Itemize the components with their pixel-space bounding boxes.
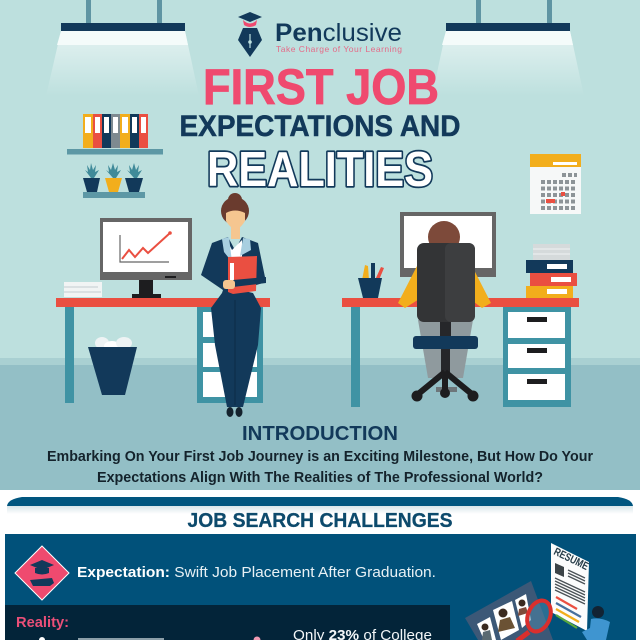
section top band xyxy=(7,497,633,506)
right desk xyxy=(342,298,579,407)
icon: magnifying glass xyxy=(517,597,555,640)
icon: laptop with candidate photos xyxy=(465,581,553,640)
left desk xyxy=(56,298,270,403)
introduction body: Expectations Align With The Realities of The Professional World? xyxy=(97,470,543,486)
icon: resume sheet: RESUME xyxy=(552,546,590,573)
wall calendar xyxy=(530,154,581,214)
logo tagline: Take Charge of Your Learning xyxy=(276,44,402,54)
right monitor xyxy=(400,212,496,277)
introduction section xyxy=(47,423,593,486)
resume illustration xyxy=(465,543,610,640)
blue panel: job search challenges xyxy=(5,534,636,640)
introduction heading: INTRODUCTION xyxy=(242,423,398,445)
icon: person in blue holding resume xyxy=(582,606,610,640)
band fade xyxy=(7,506,633,514)
background wall xyxy=(0,0,640,366)
pen cup xyxy=(358,263,384,298)
icon: binders on shelf xyxy=(67,114,163,154)
expectation text: Expectation: Swift Job Placement After Graduation. xyxy=(77,564,436,581)
woman with folder xyxy=(201,193,266,417)
left monitor with rising chart xyxy=(100,218,192,298)
white section background xyxy=(0,490,640,640)
reality heading: Reality: xyxy=(16,614,69,631)
stacked folders and papers xyxy=(526,244,577,298)
logo xyxy=(238,12,402,57)
floor xyxy=(0,358,640,490)
icon: potted plants on shelf xyxy=(83,163,145,198)
ceiling lamp left xyxy=(46,0,199,96)
title: first job: FIRST JOB xyxy=(203,59,439,115)
waste basket xyxy=(88,337,137,395)
icon: pen nib with graduation cap xyxy=(238,12,262,57)
reality box xyxy=(5,605,450,640)
statistic: left, cut off xyxy=(39,637,164,640)
stack of papers xyxy=(64,282,102,297)
title: realities: REALITIES xyxy=(207,143,433,197)
icon: resume sheet xyxy=(551,543,590,631)
icon: diamond with graduation cap xyxy=(15,546,69,600)
person seated in chair from behind xyxy=(398,221,491,402)
logo wordmark: Penclusive xyxy=(275,19,402,47)
job search heading: JOB SEARCH CHALLENGES xyxy=(188,510,452,532)
introduction body xyxy=(47,449,593,486)
ceiling lamp right xyxy=(432,0,584,96)
statistic: right marker xyxy=(254,636,260,640)
introduction body: Embarking On Your First Job Journey is an Exciting Milestone, But How Do Your xyxy=(47,449,593,465)
title: expectations and: EXPECTATIONS AND xyxy=(180,110,460,143)
